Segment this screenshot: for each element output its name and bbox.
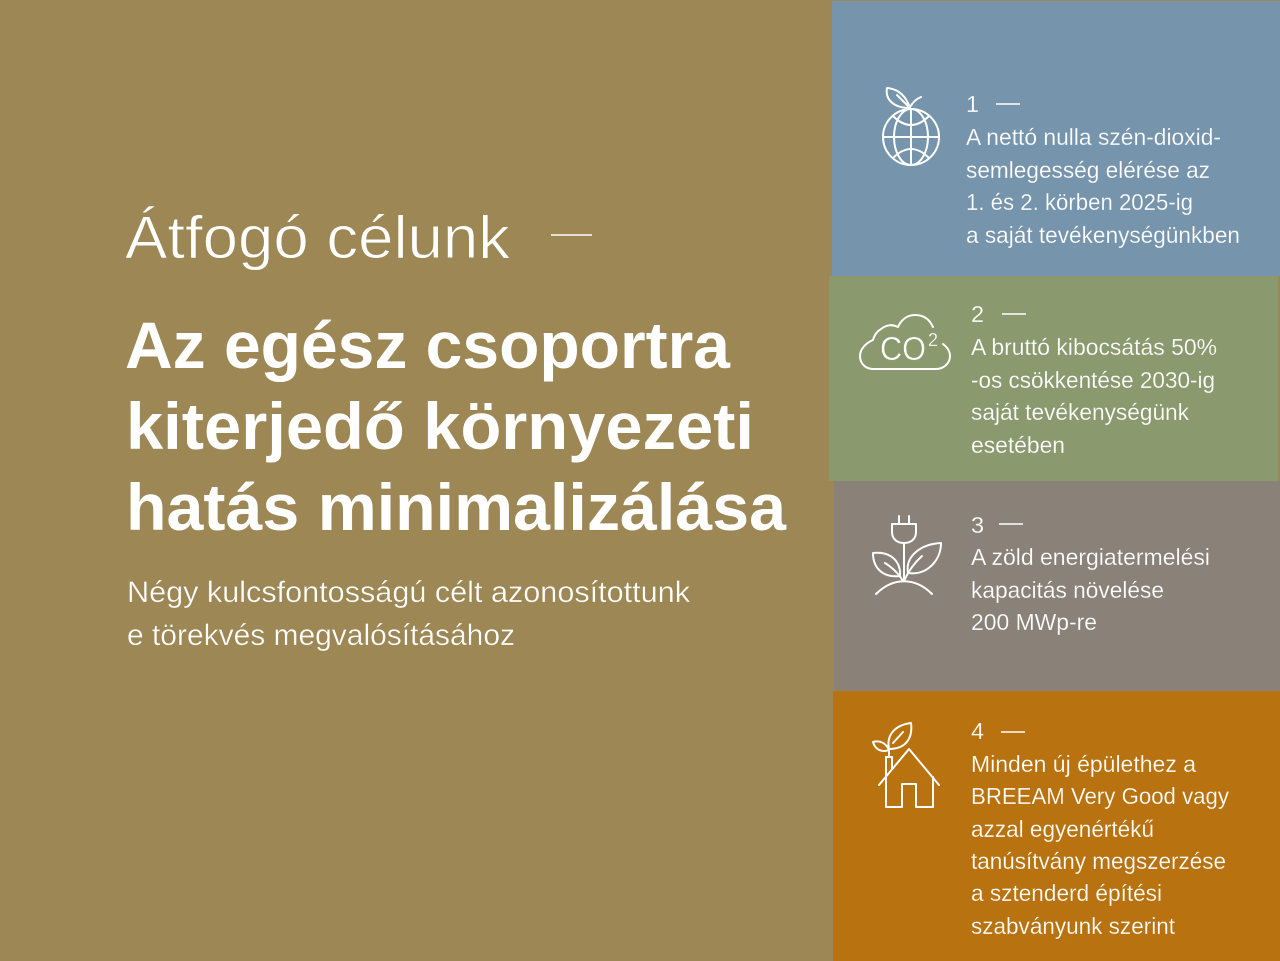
- icon: house with leaf: [873, 723, 939, 807]
- goal 2 number: 2: [971, 301, 984, 327]
- goal 4 text: tanúsítvány megszerzése: [971, 848, 1226, 874]
- goal 3 text: A zöld energiatermelési: [971, 544, 1210, 570]
- heading: kiterjedő környezeti: [126, 389, 754, 463]
- heading: [125, 308, 787, 544]
- panel: intro: [125, 204, 787, 652]
- goal 1 text: A nettó nulla szén-dioxid-: [966, 124, 1221, 150]
- goal 2 text: saját tevékenységünk: [971, 399, 1189, 425]
- goal 1 text: a saját tevékenységünkben: [966, 222, 1240, 248]
- subtitle: Átfogó célunk: Átfogó célunk: [125, 204, 511, 271]
- panel: goal 4: [833, 691, 1280, 961]
- panel: goal 3: [834, 481, 1280, 691]
- goal 4 number: 4: [971, 718, 984, 744]
- goal 2 text: esetében: [971, 432, 1065, 458]
- goal 1 text: semlegesség elérése az: [966, 157, 1210, 183]
- icon: CO2 cloud: [860, 315, 950, 369]
- goal 4 text: Minden új épülethez a: [971, 751, 1197, 777]
- intro text: e törekvés megvalósításához: [127, 619, 515, 652]
- goal 1 number: [966, 91, 1020, 117]
- goal 3 number: 3: [971, 512, 984, 538]
- intro text: Négy kulcsfontosságú célt azonosítottunk: [127, 576, 691, 609]
- goal 2 text: -os csökkentése 2030-ig: [971, 367, 1215, 393]
- panel: goal 1: [832, 1, 1280, 276]
- goal 4 text: azzal egyenértékű: [971, 816, 1154, 842]
- goal 1 text: 1. és 2. körben 2025-ig: [966, 189, 1193, 215]
- goal 3 text: 200 MWp-re: [971, 609, 1097, 635]
- goal 3 number: [971, 512, 1023, 538]
- goal 2 text: [971, 334, 1217, 458]
- intro text: [127, 576, 691, 652]
- goal 3 text: [971, 544, 1210, 635]
- goal 4 text: [971, 751, 1229, 939]
- icon: globe with leaf: [883, 88, 939, 165]
- heading: Az egész csoportra: [125, 308, 731, 382]
- panel: goal 2: [829, 276, 1278, 481]
- icon: CO2 cloud: 2: [928, 330, 938, 350]
- icon: CO2 cloud: CO: [880, 330, 926, 367]
- icon: plug plant: [873, 516, 941, 594]
- heading: hatás minimalizálása: [126, 470, 787, 544]
- goal 4 number: [971, 718, 1025, 744]
- goal 1 text: [966, 124, 1240, 248]
- goal 4 text: BREEAM Very Good vagy: [971, 783, 1229, 809]
- goal 3 text: kapacitás növelése: [971, 577, 1164, 603]
- goal 2 text: A bruttó kibocsátás 50%: [971, 334, 1217, 360]
- goal 4 text: a sztenderd építési: [971, 880, 1162, 906]
- goal 2 number: [971, 301, 1026, 327]
- goal 4 text: szabványunk szerint: [971, 913, 1175, 939]
- goal 1 number: 1: [966, 91, 979, 117]
